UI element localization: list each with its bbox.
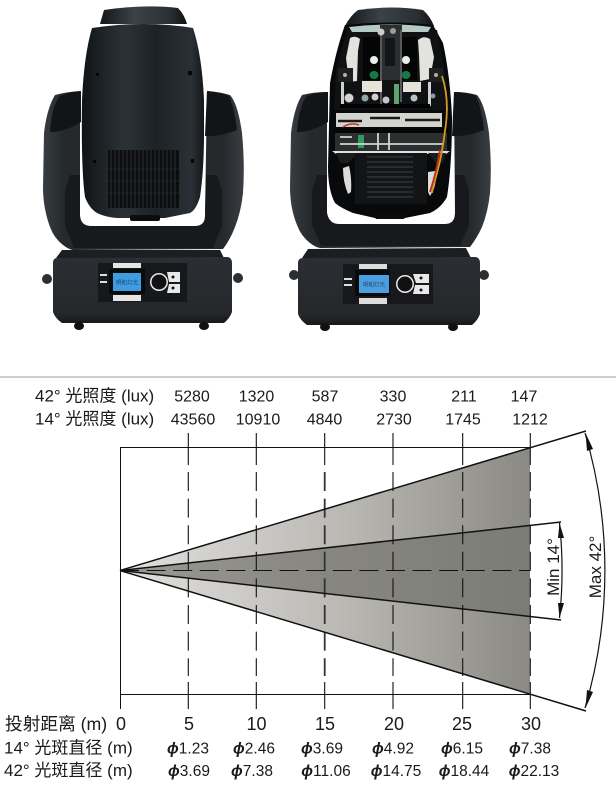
label: Max 42: Max 42° — [586, 536, 605, 598]
distance markers — [188, 433, 530, 709]
row: throw distance: 10 — [246, 714, 267, 734]
top cap — [345, 8, 434, 26]
lamp base: closed housing — [42, 250, 243, 330]
row: 42 degree spot diameter: ϕ7.38 — [231, 763, 273, 780]
row: throw distance: 25 — [452, 714, 472, 734]
lamp base: open housing — [289, 248, 489, 331]
row: 42 degree lux: 330 — [380, 388, 406, 406]
frame — [120, 448, 530, 709]
LCD screen — [359, 275, 389, 293]
knob — [396, 275, 414, 293]
lamp: closed housing, rear view — [43, 6, 244, 250]
angle arc: max 42 — [585, 433, 605, 708]
row: 42 degree spot diameter: ϕ18.44 — [439, 763, 490, 780]
label: Min 14: Min 14° — [544, 538, 563, 596]
row: 42 degree spot diameter: ϕ11.06 — [301, 763, 351, 780]
arm top shading — [50, 91, 237, 136]
head bottom lip — [375, 213, 405, 219]
row: 42 degree lux: 587 — [312, 388, 338, 406]
LCD screen — [113, 273, 141, 291]
yoke arms — [43, 91, 244, 250]
row: 42 degree lux: 42° 光照度 (lux) — [35, 386, 154, 406]
row: 14 degree spot diameter: ϕ3.69 — [301, 740, 343, 758]
row: 14 degree spot diameter: 14° 光斑直径 (m) — [4, 738, 133, 758]
row: throw distance: 30 — [521, 714, 541, 734]
row: 42 degree lux: 211 — [451, 388, 477, 406]
control panel: 明和灯光 — [363, 280, 385, 288]
row: 14 degree lux: 14° 光照度 (lux) — [35, 410, 154, 428]
knob — [150, 273, 168, 291]
row: 14 degree spot diameter: ϕ2.46 — [233, 740, 275, 758]
upper optics bay — [334, 24, 446, 110]
row: 14 degree spot diameter: ϕ1.23 — [167, 740, 209, 758]
heat sink fins — [108, 150, 179, 208]
row: 42 degree spot diameter — [4, 761, 559, 780]
illuminance table — [35, 386, 548, 428]
separator rule — [0, 376, 616, 378]
row: 14 degree lux: 1745 — [445, 412, 481, 428]
row: 14 degree lux: 1212 — [512, 412, 548, 428]
row: 14 degree lux: 2730 — [376, 412, 412, 428]
opened shell — [328, 22, 452, 218]
row: throw distance: 15 — [315, 714, 335, 734]
row: 42 degree lux: 5280 — [174, 388, 210, 406]
control panel — [98, 263, 187, 302]
heat sink radiator — [343, 153, 436, 204]
beam diagram — [120, 431, 605, 711]
yoke lower bracket — [312, 175, 469, 246]
42 degree beam cone — [120, 447, 530, 694]
row: 42 degree lux: 1320 — [239, 388, 274, 406]
row: 42 degree spot diameter: ϕ22.13 — [509, 763, 559, 780]
screws — [93, 71, 194, 163]
lamp: open housing, internal view — [290, 8, 491, 248]
row: throw distance: 投射距离 (m) — [5, 714, 107, 734]
head body — [82, 24, 204, 218]
row: 14 degree spot diameter: ϕ7.38 — [509, 740, 551, 758]
row: 14 degree lux: 4840 — [307, 412, 342, 428]
row: throw distance — [5, 714, 541, 734]
row: throw distance: 20 — [384, 714, 404, 734]
head bottom lip — [130, 215, 160, 221]
row: 14 degree lux: 10910 — [236, 412, 280, 428]
yoke arms — [290, 92, 491, 248]
distance and spot diameter table — [4, 714, 559, 780]
mid electronics boards — [332, 113, 450, 163]
row: 42 degree spot diameter: ϕ3.69 — [168, 763, 210, 780]
row: throw distance: 0 — [116, 714, 126, 734]
row: 42 degree lux: 147 — [511, 388, 537, 406]
beam centre line — [120, 570, 530, 572]
angle arc: min 14 — [558, 523, 564, 618]
row: 14 degree spot diameter: ϕ4.92 — [372, 740, 414, 758]
row: 42 degree lux — [35, 386, 537, 406]
row: 14 degree lux: 43560 — [171, 412, 215, 428]
14 degree beam cone — [120, 525, 530, 617]
control panel — [343, 264, 433, 304]
yoke lower bracket — [65, 175, 222, 248]
row: throw distance: 5 — [184, 714, 194, 734]
arm top shading — [297, 92, 484, 136]
row: 14 degree spot diameter: ϕ6.15 — [441, 740, 483, 758]
beam edges — [120, 431, 586, 711]
top cap — [100, 6, 187, 24]
wire bundle — [432, 76, 447, 193]
row: 14 degree lux — [35, 410, 548, 428]
row: 14 degree spot diameter — [4, 738, 551, 758]
row: 42 degree spot diameter: ϕ14.75 — [371, 763, 421, 780]
control panel: 明和灯光 — [116, 278, 138, 286]
row: 42 degree spot diameter: 42° 光斑直径 (m) — [4, 761, 133, 780]
